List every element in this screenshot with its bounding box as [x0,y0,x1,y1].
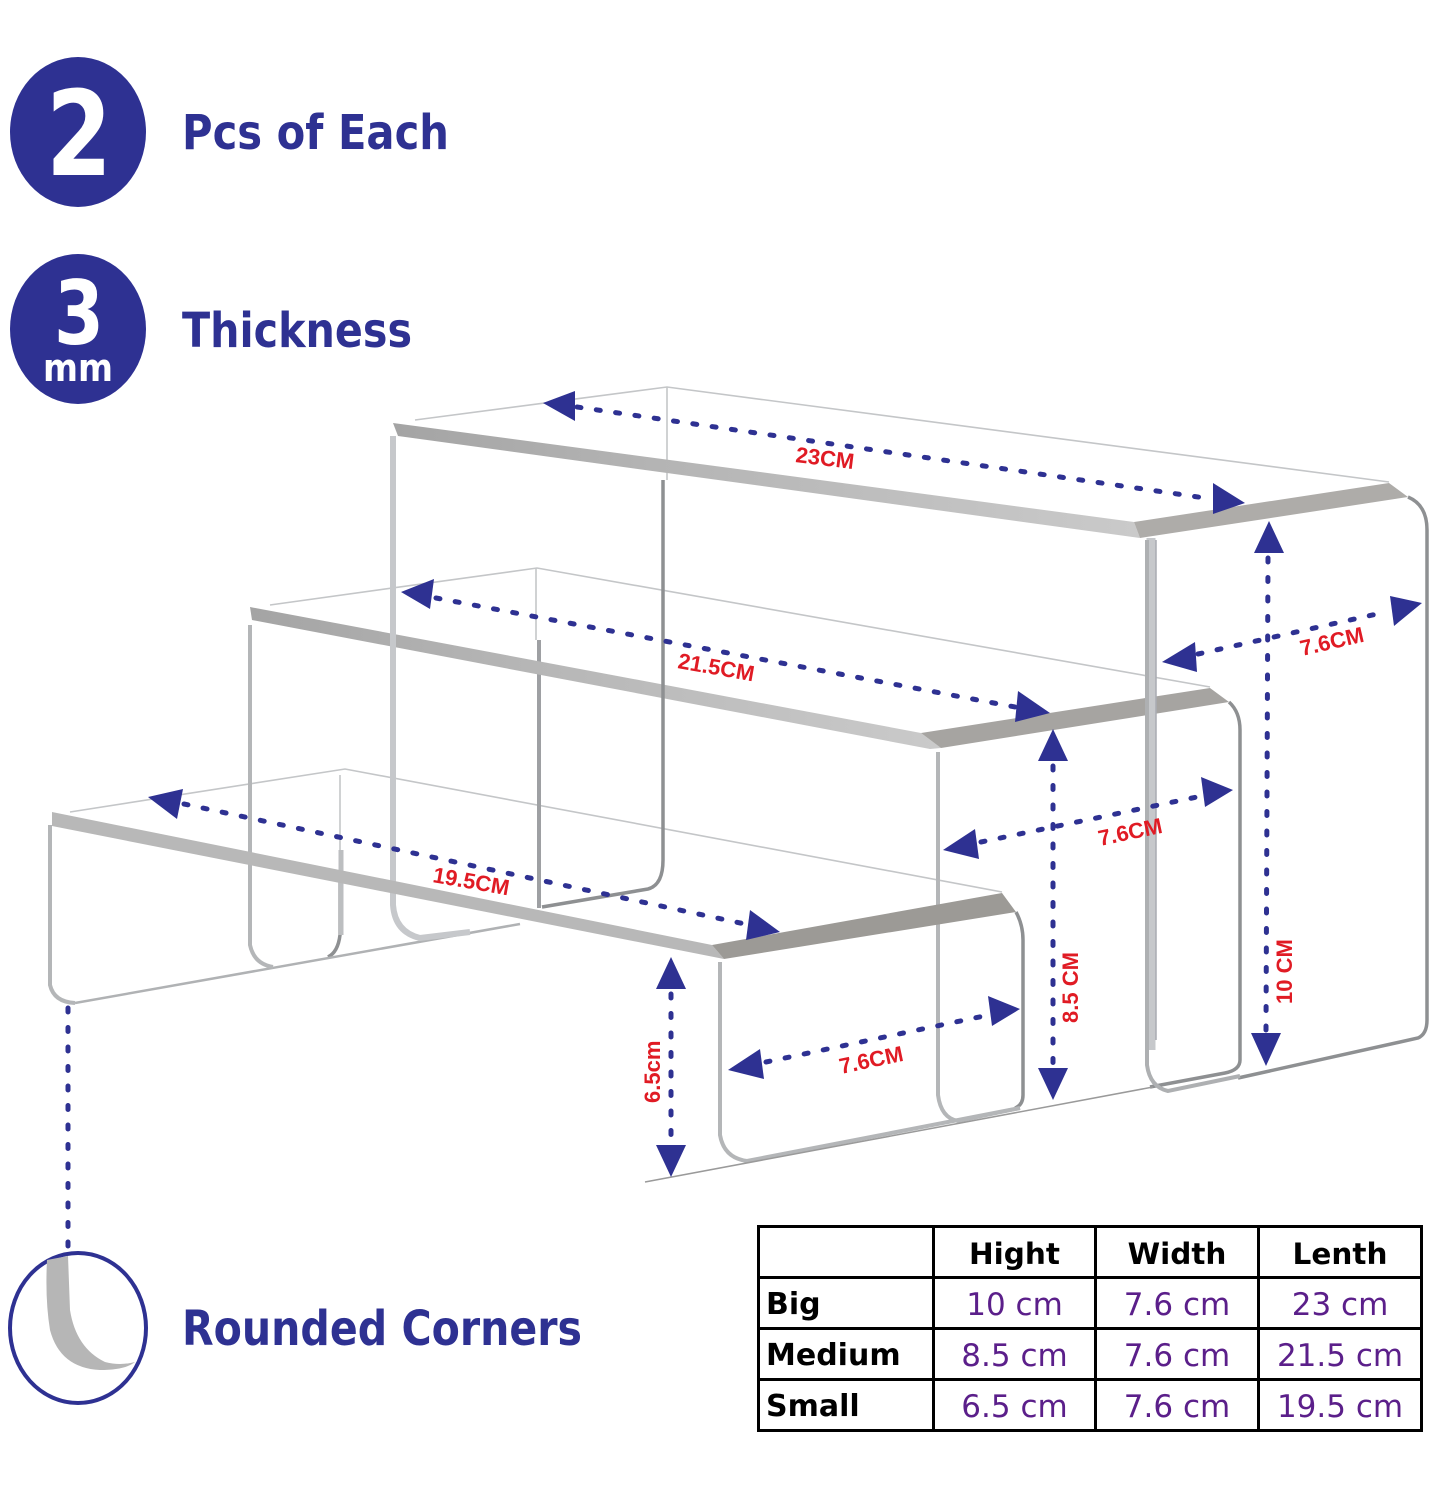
size table: 8.5 cm [961,1338,1068,1374]
dimension: medium depth 7.6CM: 7.6CM [1096,813,1164,851]
dotted leader to rounded corner [66,1008,70,1252]
size table [757,1225,1423,1432]
size table: Lenth [1293,1237,1387,1271]
dimension: 8.5 CM: 8.5 CM [1058,952,1083,1023]
dimension: 23CM [543,391,1245,514]
size table: 23 cm [1292,1287,1388,1323]
dimension: big depth 7.6CM: 7.6CM [1298,622,1366,661]
dimension: 10 CM [1251,521,1297,1066]
size table: 6.5 cm [961,1389,1068,1425]
size table: Small [766,1389,860,1424]
big riser [393,387,1427,1091]
size table: 7.6 cm [1124,1389,1230,1425]
size table: 7.6 cm [1124,1338,1230,1374]
dimension: small depth 7.6CM [728,996,1020,1079]
size table: Medium [766,1338,901,1373]
badge: 3 mm: mm [43,346,113,390]
size table: Big [766,1287,821,1322]
dimension: 21.5CM: 21.5CM [676,648,756,686]
size table: 7.6 cm [1124,1287,1230,1323]
dimension: 23CM: 23CM [794,442,856,474]
size table: 21.5 cm [1277,1338,1403,1374]
size table: 10 cm [966,1287,1063,1323]
dimension: big depth 7.6CM [1162,596,1422,672]
dimension: 21.5CM [401,579,1050,722]
small riser front [50,812,1153,1182]
badge: 3 mm: 3 [54,262,104,365]
dimension: small depth 7.6CM: 7.6CM [837,1041,905,1079]
heading: Pcs of Each: Pcs of Each [182,105,449,161]
size table: Hight [969,1237,1060,1271]
badge: 2 pieces: 2 [46,65,112,203]
small riser back parts [70,769,1002,1003]
dimension: medium depth 7.6CM [943,777,1233,859]
dimension: 19.5CM [148,789,780,940]
icon: rounded corner detail [10,1253,146,1403]
size table: 19.5 cm [1277,1389,1403,1425]
dimension: 10 CM: 10 CM [1272,939,1297,1004]
badge: 3 mm [10,254,146,404]
heading: Thickness: Thickness [182,303,412,359]
heading: Rounded Corners: Rounded Corners [182,1301,582,1357]
size table: Width [1128,1237,1226,1271]
dimension: 6.5cm [640,957,686,1177]
badge: 2 pieces [10,57,146,207]
medium riser [250,568,1240,1121]
dimension: 6.5cm: 6.5cm [640,1041,665,1103]
dimension: 8.5 CM [1038,729,1083,1100]
dimension: 19.5CM: 19.5CM [431,862,511,900]
